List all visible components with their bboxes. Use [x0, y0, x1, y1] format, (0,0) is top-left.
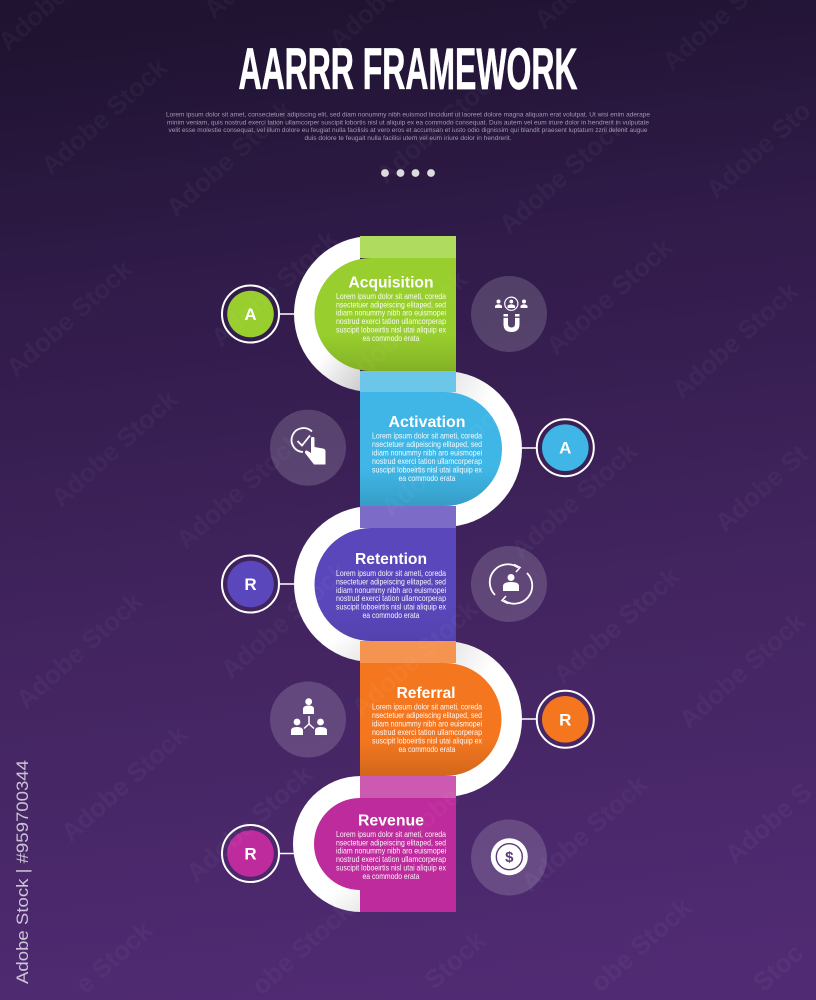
- white arc: [293, 776, 456, 912]
- heading: Acquisition: [348, 274, 434, 291]
- watermark pattern: Adobe Stock: [673, 606, 811, 735]
- panel: activation: [270, 371, 594, 527]
- body text: [372, 432, 482, 483]
- panel: retention: [222, 506, 547, 662]
- coloured card: [314, 258, 456, 371]
- body text: nsectetuer adipeiscing elitaped, sed: [372, 711, 482, 720]
- body text: idiam nonummy nibh aro euismopei: [336, 847, 446, 856]
- watermark pattern: Adobe Stock: [55, 719, 193, 848]
- top strip: [360, 371, 456, 392]
- body text: [336, 830, 446, 881]
- watermark pattern: Adobe Stock: [385, 729, 523, 858]
- heading: Retention: [355, 551, 427, 568]
- body text: idiam nonummy nibh aro euismopei: [372, 448, 482, 458]
- icon: hand tapping check: [270, 410, 346, 486]
- letter badge: R: [244, 575, 257, 594]
- icon: magnet and people: [471, 276, 547, 352]
- body text: [372, 703, 482, 754]
- top strip: [360, 236, 456, 258]
- body text: nsectetuer adipeiscing elitaped, sed: [372, 440, 482, 449]
- body text: ea commodo erata: [362, 872, 420, 881]
- watermark pattern: Stoc: [747, 937, 809, 997]
- watermark pattern: Adobe S: [719, 777, 816, 869]
- body text: ea commodo erata: [398, 474, 456, 483]
- intro text block: velit esse molestie consequat, vel illum dolore eu feugiat nulla facilisis at vero eros et accumsan et iusto odio dignissim qui blandit praesent luptatum zzril delenit augue: [168, 127, 648, 134]
- intro text block: duis dolore te feugait nulla facilisi utem vel eum iriure dolor in hendrerit.: [304, 135, 512, 142]
- watermark pattern: Adobe St: [709, 439, 814, 537]
- watermark pattern: Adobe Stock: [10, 586, 148, 715]
- letter badge: [222, 286, 279, 342]
- body text: [336, 569, 446, 620]
- body text: ea commodo erata: [398, 745, 456, 754]
- top strip: [360, 776, 456, 798]
- body text: nostrud exerci tation ullamcorperap: [372, 457, 482, 466]
- watermark pattern: Adobe Stock: [215, 556, 353, 685]
- letter badge: A: [559, 439, 571, 458]
- watermark pattern: Adobe Sto: [700, 95, 816, 204]
- watermark pattern: Adobe Stock: [505, 436, 643, 565]
- icon: referral network: [270, 682, 346, 758]
- coloured card: [360, 392, 502, 506]
- top strip: [360, 641, 456, 663]
- pagination dots: [381, 169, 435, 177]
- watermark pattern: Adobe Stock: [375, 394, 513, 523]
- heading: Activation: [388, 414, 466, 431]
- body text: idiam nonummy nibh aro euismopei: [336, 309, 446, 318]
- letter badge: R: [244, 844, 257, 864]
- coloured card: [360, 663, 502, 776]
- letter badge: A: [244, 305, 257, 324]
- body text: idiam nonummy nibh aro euismopei: [372, 720, 482, 728]
- connector: [521, 718, 537, 720]
- watermark pattern: Adobe Stock: [160, 94, 298, 223]
- top strip: [360, 506, 456, 528]
- connector: [521, 447, 537, 449]
- watermark pattern: Adobe Stock: [205, 224, 343, 353]
- body text: nsectetuer adipeiscing elitaped, sed: [336, 300, 446, 309]
- card shading: [360, 392, 502, 506]
- watermark pattern: Adobe Stock: [45, 384, 183, 513]
- watermark pattern: obe Stock: [585, 892, 697, 998]
- white arc: [294, 506, 456, 662]
- white arc: [360, 641, 522, 797]
- icon: person in cycle: [471, 546, 547, 622]
- body text: Lorem ipsum dolor sit ameti, coreda: [372, 703, 482, 712]
- intro text block: Lorem ipsum dolor sit amet, consectetuer adipiscing elit, sed diam nonummy nibh euismod tincidunt ut laoreet dolore magna aliquam erat volutpat. Ut wisi enim aderape: [166, 112, 650, 118]
- letter badge: [537, 419, 594, 476]
- body text: Lorem ipsum dolor sit ameti, coreda: [336, 569, 446, 578]
- watermark pattern: Adobe Stock: [493, 111, 631, 240]
- body text: Lorem ipsum dolor sit ameti, coreda: [336, 292, 446, 301]
- watermark pattern: Adobe Stock: [345, 594, 483, 723]
- body text: [336, 292, 446, 343]
- body text: suscipit loboeirtis nisl utai aliquip ex: [372, 465, 482, 474]
- body text: nsectetuer adipeiscing elitaped, sed: [336, 577, 446, 586]
- connector: [279, 852, 295, 854]
- watermark pattern: Adobe Stock: [335, 264, 473, 393]
- connector: [279, 313, 295, 315]
- body text: nostrud exerci tation ullamcorperap: [372, 728, 482, 737]
- watermark pattern: Stock: [418, 925, 491, 995]
- body text: suscipit loboeirtis nisl utai aliquip ex: [336, 864, 446, 873]
- heading: Referral: [396, 685, 456, 702]
- watermark pattern: Adobe Stock: [35, 52, 173, 181]
- body text: nsectetuer adipeiscing elitaped, sed: [336, 838, 446, 847]
- panel: revenue: [222, 776, 547, 912]
- white arc: [360, 371, 522, 527]
- body text: idiam nonummy nibh aro euismopei: [336, 586, 446, 595]
- watermark pattern: obe Stock: [246, 895, 358, 1000]
- body text: suscipit loboeirtis nisl utai aliquip ex: [336, 326, 446, 335]
- body text: suscipit loboeirtis nisl utai aliquip ex: [336, 603, 446, 612]
- body text: nostrud exerci tation ullamcorperap: [336, 594, 446, 603]
- body text: ea commodo erata: [362, 611, 420, 620]
- coloured card: [314, 798, 456, 912]
- watermark pattern: Adobe Stock: [0, 254, 138, 383]
- side credit: Adobe Stock | #959700344: [13, 760, 32, 984]
- intro text block: minim veniam, quis nostrud exerci tation ullamcorper suscipit lobortis nisl ut aliquip ex ea commodo consequat. Duis autem vel eum iriure dolor in hendrerit in vulputate: [167, 119, 649, 126]
- watermark pattern: Adobe Stock: [515, 769, 653, 898]
- white arc: [294, 236, 372, 392]
- watermark pattern: Adobe Stock: [370, 61, 508, 190]
- body text: suscipit loboeirtis nisl utai aliquip ex: [372, 736, 482, 746]
- card shading: [314, 258, 456, 371]
- panel: acquisition: [222, 236, 547, 392]
- letter badge: R: [559, 710, 571, 729]
- watermark pattern: Adobe Stock: [666, 276, 804, 405]
- heading: Revenue: [358, 812, 424, 829]
- icon: dollar coin: [471, 820, 547, 896]
- icon: dollar coin: $: [505, 849, 514, 866]
- panel: referral: [270, 641, 594, 797]
- body text: ea commodo erata: [362, 334, 420, 343]
- connector: [279, 583, 295, 585]
- letter badge: [222, 825, 279, 882]
- card shading: [314, 528, 456, 641]
- coloured card: [314, 528, 456, 641]
- intro text block: [166, 112, 650, 142]
- watermark pattern: e Stock: [69, 915, 158, 999]
- letter badge: [537, 691, 594, 748]
- watermark pattern: Adobe Stock: [540, 232, 678, 361]
- body text: nostrud exerci tation ullamcorperap: [336, 317, 446, 326]
- watermark pattern: Adobe Stock: [170, 426, 308, 555]
- watermark pattern: Adobe Stock: [180, 759, 318, 888]
- watermark pattern: Adobe Stock: [547, 561, 685, 690]
- card shading: [360, 663, 502, 776]
- body text: Lorem ipsum dolor sit ameti, coreda: [336, 830, 446, 839]
- body text: nostrud exerci tation ullamcorperap: [336, 855, 446, 864]
- letter badge: [222, 556, 279, 612]
- body text: Lorem ipsum dolor sit ameti, coreda: [372, 432, 482, 441]
